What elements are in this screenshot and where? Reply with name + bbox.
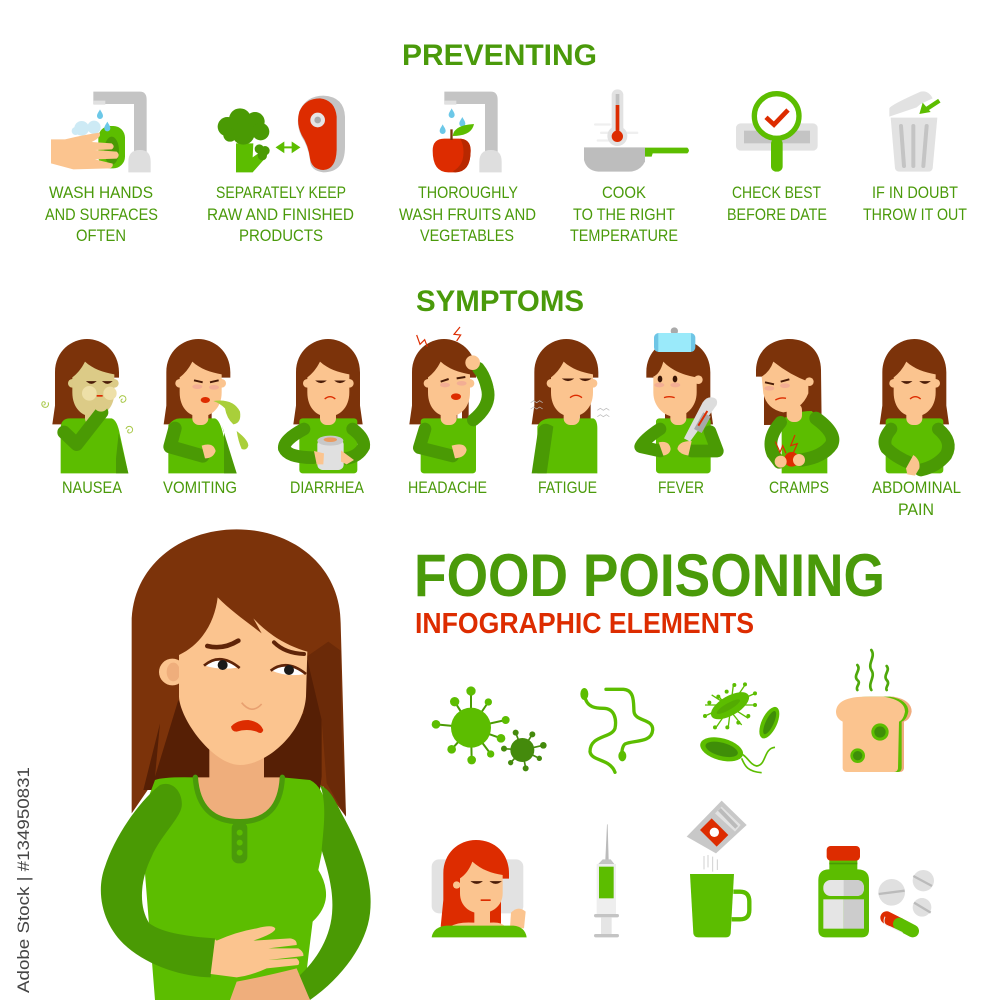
- label: separately keep: RAW AND FINISHED: [207, 206, 354, 224]
- icon: broccoli and raw meat: [218, 96, 345, 172]
- label: cook: TEMPERATURE: [570, 227, 678, 245]
- figure: nausea: [42, 339, 133, 473]
- heading: symptoms: SYMPTOMS: [416, 285, 584, 318]
- figure: cramps: [756, 339, 833, 473]
- icon: magnifier checking the date: [736, 94, 818, 172]
- neck: [195, 747, 283, 827]
- hands: [211, 926, 310, 1000]
- subtitle: INFOGRAPHIC ELEMENTS: [415, 608, 754, 640]
- label: diarrhea: DIARRHEA: [290, 479, 364, 497]
- label: wash hands: WASH HANDS: [49, 184, 153, 202]
- label: headache: HEADACHE: [408, 479, 487, 497]
- panel: causes and treatments: [432, 650, 934, 937]
- label: wash hands: OFTEN: [76, 227, 126, 245]
- icon: medicine bottle and pills: [818, 846, 934, 937]
- label: vomiting: VOMITING: [163, 479, 237, 497]
- heading: preventing: PREVENTING: [402, 39, 597, 72]
- label: cramps: CRAMPS: [769, 479, 829, 497]
- label: wash hands: [45, 184, 158, 245]
- figure: fatigue: [531, 339, 609, 473]
- hair back: [132, 529, 346, 817]
- label: separately keep: [207, 184, 354, 245]
- icon: viruses: [432, 686, 547, 771]
- icon: trash bin: [889, 91, 939, 172]
- figure: headache: [409, 327, 488, 473]
- icon: sachet and mug: [687, 801, 749, 937]
- label: separately keep: PRODUCTS: [239, 227, 323, 245]
- panel: symptoms right: [531, 327, 961, 519]
- icon: thermometer and pan: [584, 89, 689, 172]
- face: [159, 597, 307, 765]
- stock image id: Adobe Stock | #134950831: [15, 767, 33, 993]
- label: separately keep: SEPARATELY KEEP: [216, 184, 346, 202]
- figure: diarrhea: [284, 339, 364, 473]
- icon: washing an apple: [433, 92, 502, 172]
- label: wash hands: AND SURFACES: [45, 206, 158, 224]
- label: cook: COOK: [602, 184, 646, 202]
- label: nausea: NAUSEA: [62, 479, 122, 497]
- label: fatigue: FATIGUE: [538, 479, 597, 497]
- shirt: [140, 777, 327, 1000]
- label: check date: BEFORE DATE: [727, 206, 827, 224]
- label: throw out: IF IN DOUBT: [872, 184, 958, 202]
- label: cook: TO THE RIGHT: [573, 206, 675, 224]
- icon: moldy bread: [836, 650, 912, 772]
- label: check date: CHECK BEST: [732, 184, 821, 202]
- icon: woman resting in bed: [432, 840, 527, 937]
- icon: worms: [580, 688, 653, 772]
- icon: wash hands: [51, 92, 151, 172]
- label: thoroughly wash: VEGETABLES: [420, 227, 514, 245]
- figure: vomiting: [164, 339, 248, 473]
- title: FOOD POISONING: [414, 542, 885, 609]
- label: thoroughly wash: [399, 184, 536, 245]
- label: thoroughly wash: THOROUGHLY: [418, 184, 518, 202]
- label: abdominal pain: PAIN: [898, 501, 934, 519]
- label: fever: FEVER: [658, 479, 704, 497]
- figure: fever: [641, 327, 717, 473]
- panel: preventing icons left: [45, 92, 536, 245]
- label: throw out: THROW IT OUT: [863, 206, 967, 224]
- label: abdominal pain: [872, 479, 961, 519]
- icon: bacteria: [698, 682, 783, 773]
- label: cook: [570, 184, 678, 245]
- icon: syringe: [594, 824, 619, 937]
- label: thoroughly wash: WASH FRUITS AND: [399, 206, 536, 224]
- label: abdominal pain: ABDOMINAL: [872, 479, 961, 497]
- figure: abdominal pain: [880, 339, 949, 476]
- panel: preventing icons right: [570, 89, 967, 245]
- sleeves: [101, 784, 371, 1000]
- label: throw out: [863, 184, 967, 224]
- panel: symptoms left: [42, 327, 488, 497]
- label: check date: [727, 184, 827, 224]
- main illustration: sick woman: [101, 529, 371, 1000]
